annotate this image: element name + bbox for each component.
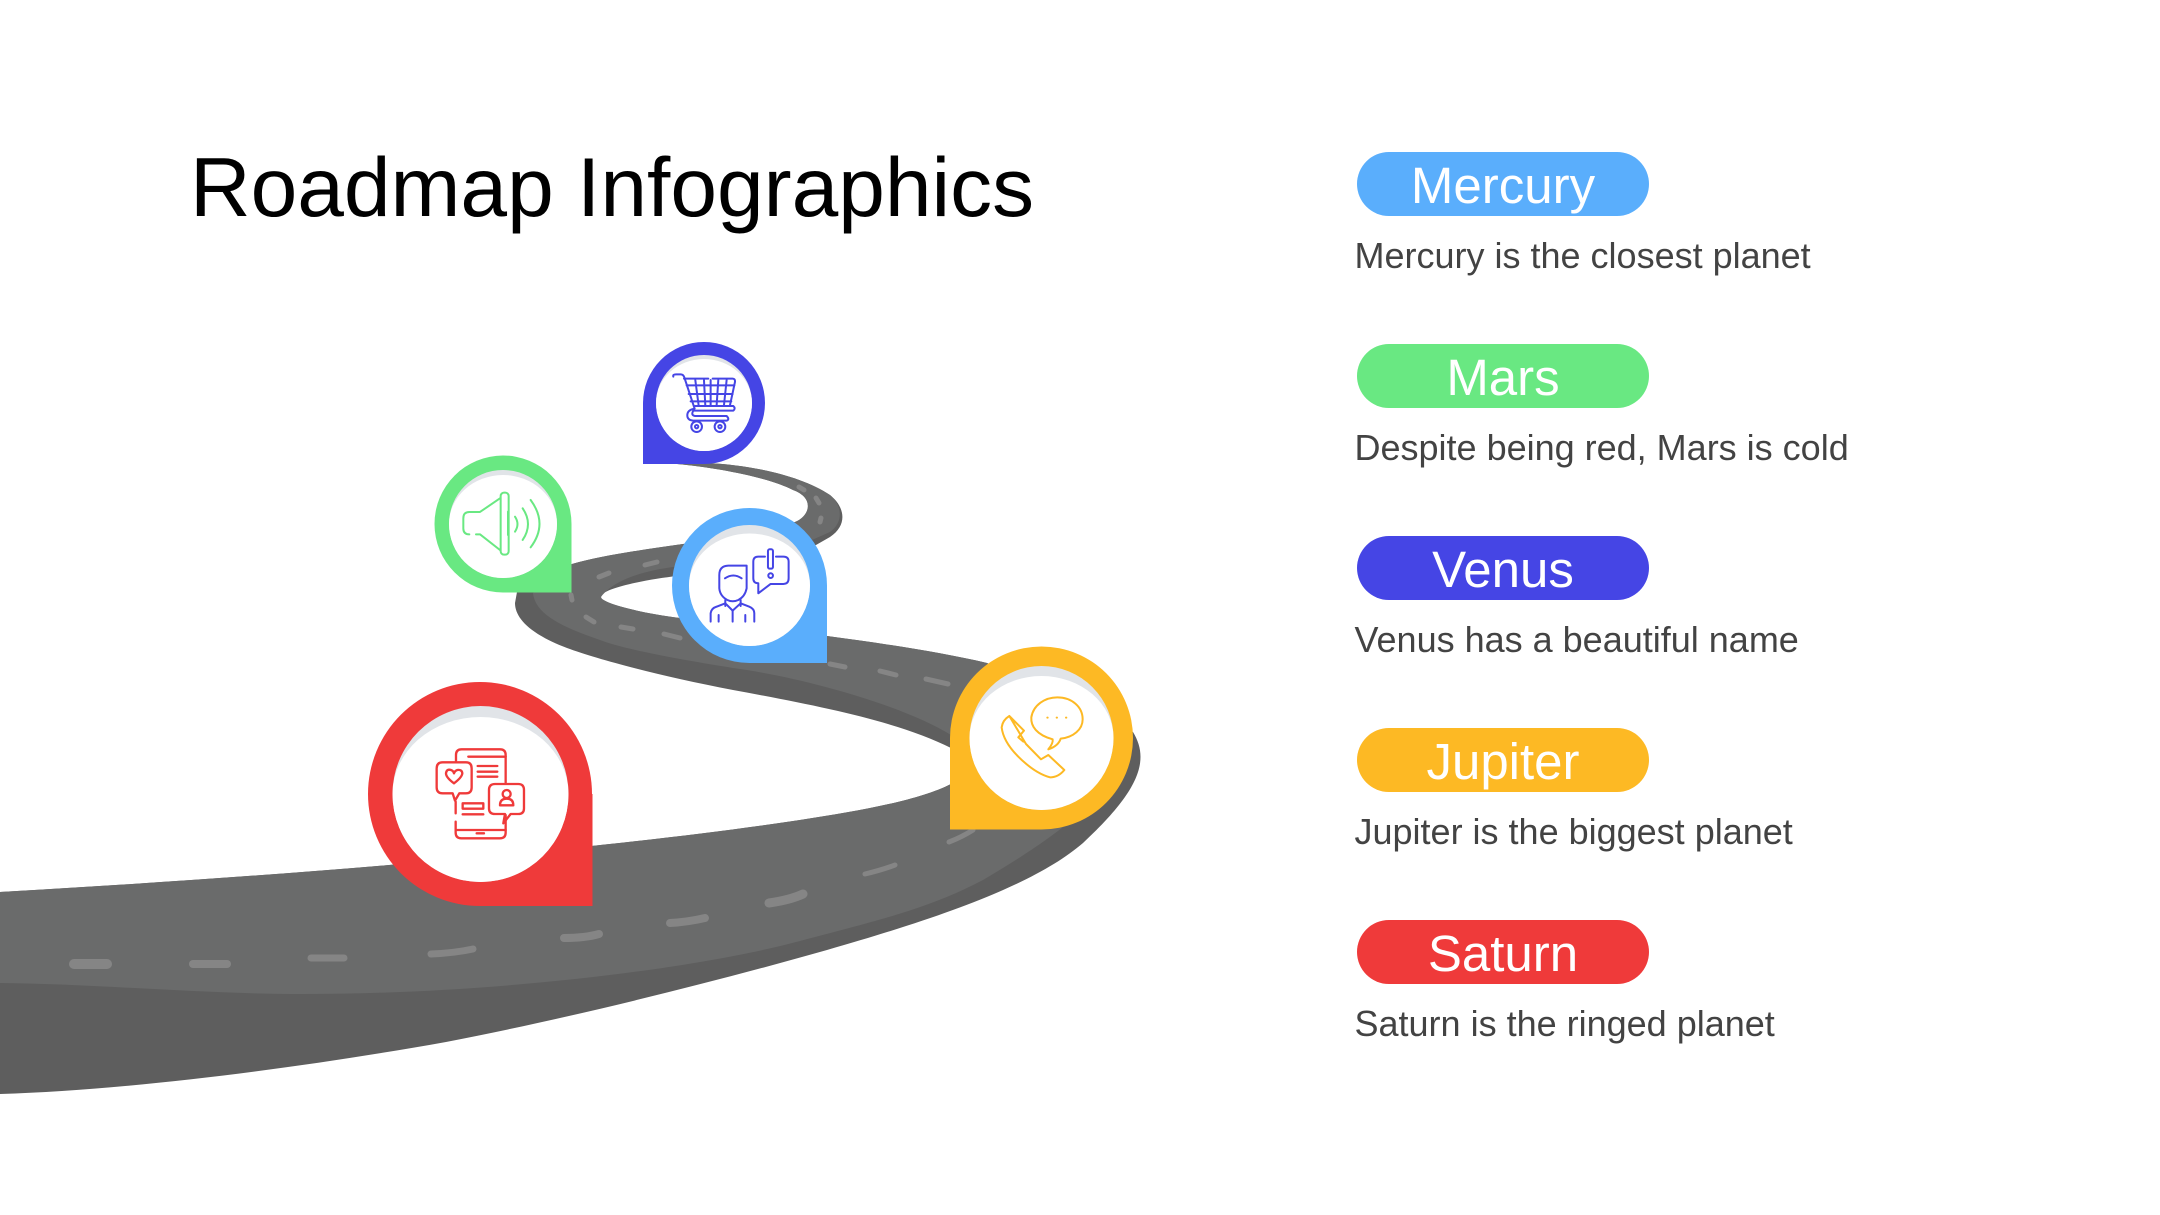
legend item: Jupiter [1354,728,1793,852]
legend item: Venus [1354,536,1799,660]
icon: shopping cart [673,374,735,432]
legend item: Jupiter: Jupiter [1426,733,1580,790]
road [0,450,1140,1094]
pin: green speaker [434,456,572,592]
legend item: Venus: Venus [1432,541,1574,598]
legend item: Mars: Despite being red, Mars is cold [1354,427,1849,468]
legend item: Saturn: Saturn is the ringed planet [1354,1003,1775,1044]
legend item: Mars [1354,344,1849,468]
legend item: Mercury: Mercury [1411,157,1596,214]
icon: person with alert bubble [711,549,789,622]
legend item: Mercury: Mercury is the closest planet [1354,235,1811,276]
pin: red phone social [368,682,592,906]
title: Roadmap Infographics [190,140,1034,234]
icon: phone and speech bubble [1002,697,1083,777]
pin: indigo shopping cart [643,342,765,464]
legend item: Jupiter: Jupiter is the biggest planet [1354,811,1793,852]
road dashes [74,487,973,964]
legend item: Mars: Mars [1446,349,1560,406]
legend item: Saturn [1354,920,1775,1044]
legend item: Venus: Venus has a beautiful name [1354,619,1799,660]
icon: speaker [463,493,539,555]
pin: yellow phone [950,646,1133,830]
legend item: Saturn: Saturn [1428,925,1578,982]
pin: blue person with alert [672,508,827,663]
icon: smartphone with social bubbles [437,749,524,838]
legend item: Mercury [1354,152,1811,276]
